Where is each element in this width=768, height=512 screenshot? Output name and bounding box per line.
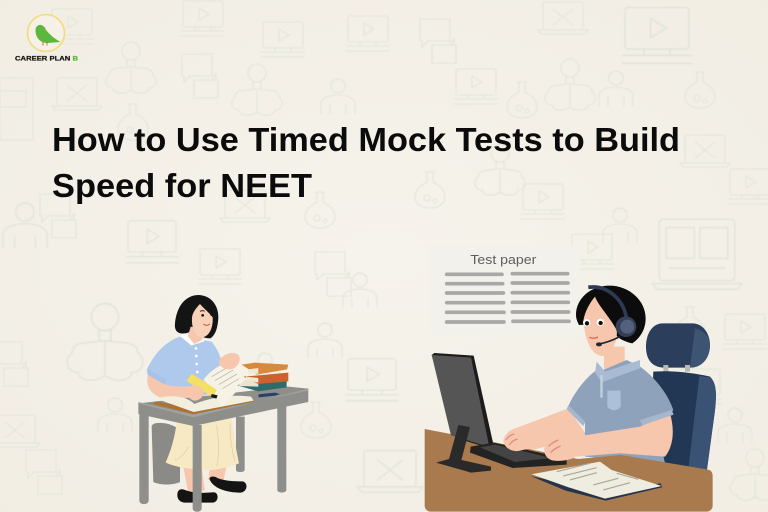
desk legs front [139,414,202,512]
standing page with text lines [203,359,250,407]
torso: blue blouse [147,337,223,405]
highlighter [187,374,217,398]
open book on desk [531,462,662,501]
computer monitor [432,353,494,473]
hands [503,427,542,451]
left arm reaching keyboard [504,408,587,452]
logo: Career Plan B [15,14,78,62]
paper text lines [447,274,569,322]
title [52,121,680,204]
face and neck [188,327,202,344]
hair [576,286,646,343]
logo wordmark: CAREER PLAN B [15,56,78,62]
office chair [646,323,716,472]
arm [147,375,205,402]
back desk legs [236,407,286,492]
illustration: student girl studying at a desk [138,295,308,512]
desk [425,429,713,512]
stack of books [237,363,288,391]
hands [187,385,204,401]
hair [175,295,218,338]
neck and face [583,297,625,373]
open book [153,399,255,414]
torso: grey-blue polo shirt [567,360,673,463]
icon: green bird [36,25,60,46]
icon: yellow ring [28,14,64,52]
illustration: student at computer desk with headset [425,245,716,512]
desk top [138,387,308,426]
title: How to Use Timed Mock Tests to Build [52,121,680,158]
test paper card [430,245,580,336]
paper heading: Test paper [470,253,536,267]
shoes [177,477,246,503]
right arm [567,413,673,457]
keyboard [470,443,567,468]
paper sheet [430,245,580,336]
stool [152,423,180,484]
headset [588,287,636,346]
pen [258,393,280,397]
legs and skirt [166,418,239,493]
sleeve cuff [640,410,674,425]
title: Speed for NEET [52,167,312,204]
